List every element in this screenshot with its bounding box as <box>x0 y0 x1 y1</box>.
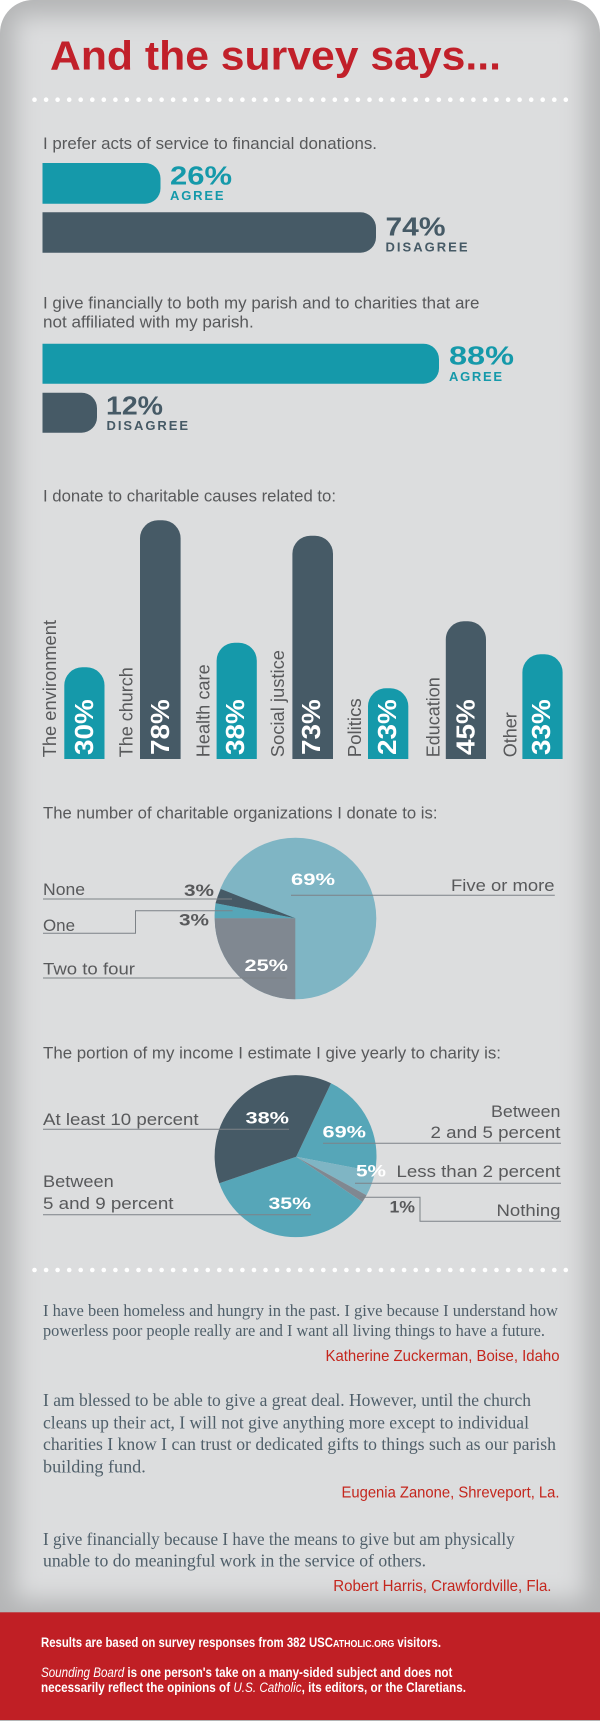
value: 26% agree: 26% <box>170 160 232 190</box>
value: 74% disagree <box>386 212 468 255</box>
column: health care 38%: Health care <box>194 664 214 757</box>
question 2: not affiliated with my parish. <box>43 313 254 331</box>
label: none: 3% <box>184 881 214 900</box>
label: none <box>43 880 232 900</box>
quote: Katherine Zuckerman: I have been homeless and hungry in the past. I give because I understand how <box>43 1301 558 1320</box>
question 2 <box>43 294 480 331</box>
panel: charitable causes bar chart <box>40 488 563 759</box>
footer: disclaimer: necessarily reflect the opinions of U.S. Catholic, its editors, or the Claretians. <box>41 1680 466 1695</box>
label: one: 3% <box>179 910 209 929</box>
label: between 2 and 5 percent: 2 and 5 percent <box>430 1123 561 1142</box>
footer: disclaimer: Sounding Board is one person's take on a many-sided subject and does not <box>41 1665 453 1680</box>
column: health care 38%: 38% <box>220 699 250 755</box>
column: the environment 30%: The environment <box>40 620 60 757</box>
column: other 33%: Other <box>501 712 521 757</box>
quote: Katherine Zuckerman: powerless poor people really are and I want all living things to have a future. <box>43 1321 545 1340</box>
column: the environment 30%: 30% <box>69 699 99 755</box>
value: 88% agree: 88% <box>449 340 514 370</box>
column: other 33%: 33% <box>526 699 556 755</box>
column: other 33% <box>501 654 563 759</box>
quote: Eugenia Zanone: charities I know I can trust or dedicated gifts to things such as our parish <box>43 1434 556 1454</box>
label: less than 2 percent: Less than 2 percent <box>396 1162 561 1181</box>
value: 12% disagree: 12% <box>106 390 163 420</box>
dotted divider top <box>32 97 568 102</box>
label: five or more: 69% <box>291 870 335 889</box>
label: between 2 and 5 percent <box>322 1102 561 1143</box>
label: between 5 and 9 percent <box>43 1172 311 1215</box>
pie chart 2 <box>215 1075 377 1237</box>
label: less than 2 percent: 5% <box>356 1162 386 1181</box>
column: the church 78% <box>116 520 181 759</box>
column: health care 38% <box>194 643 257 759</box>
quote: Eugenia Zanone: building fund. <box>43 1456 146 1476</box>
quote: Robert Harris: Robert Harris, Crawfordville, Fla. <box>333 1578 552 1595</box>
label: between 5 and 9 percent: Between <box>43 1172 114 1191</box>
column: education 45% <box>423 621 486 759</box>
column: education 45%: Education <box>423 677 443 757</box>
value: 88% agree <box>449 340 514 384</box>
column: politics 23% <box>345 688 408 759</box>
label: between 5 and 9 percent: 5 and 9 percent <box>43 1194 174 1213</box>
footer: survey note: Results are based on survey responses from 382 USCATHOLIC.ORG visitors. <box>41 1635 441 1650</box>
quote: Eugenia Zanone: I am blessed to be able to give a great deal. However, until the church <box>43 1390 531 1410</box>
value: 12% disagree <box>106 390 188 433</box>
question 3: I donate to charitable causes related to: <box>43 488 336 506</box>
column: social justice 73%: Social justice <box>268 650 288 757</box>
value: 26% agree: AGREE <box>170 188 224 203</box>
panel: acts of service <box>42 135 468 255</box>
quote: Eugenia Zanone <box>43 1390 560 1501</box>
title: And the survey says... <box>50 32 501 78</box>
value: 74% disagree: DISAGREE <box>386 240 468 255</box>
column: education 45%: 45% <box>450 699 480 755</box>
panel: portion of income pie chart <box>43 1044 561 1237</box>
panel: number of organizations pie chart <box>43 804 555 999</box>
label: one: One <box>43 916 75 935</box>
label: less than 2 percent <box>355 1162 561 1183</box>
label: nothing: Nothing <box>496 1201 560 1220</box>
value: 26% agree <box>170 160 232 203</box>
value: 74% disagree: 74% <box>386 212 446 242</box>
dotted divider bottom <box>32 1268 568 1272</box>
value: 12% disagree: DISAGREE <box>106 418 188 433</box>
question 2: I give financially to both my parish and to charities that are <box>43 294 480 312</box>
label: two to four: 25% <box>244 956 288 975</box>
bar: disagree 12% <box>42 393 97 433</box>
label: none: None <box>43 880 85 899</box>
quote: Katherine Zuckerman <box>43 1301 560 1365</box>
question 4: The number of charitable organizations I donate to is: <box>43 804 438 822</box>
quote: Eugenia Zanone: Eugenia Zanone, Shreveport, La. <box>342 1484 560 1501</box>
quote: Robert Harris <box>43 1529 552 1595</box>
bar: disagree 74% <box>42 212 376 253</box>
label: between 2 and 5 percent: 69% <box>322 1123 366 1142</box>
column: social justice 73%: 73% <box>296 699 326 755</box>
label: two to four: Two to four <box>43 959 135 978</box>
panel: parish and charities <box>42 294 514 433</box>
value: 88% agree: AGREE <box>449 369 502 384</box>
column: the environment 30% <box>40 620 104 759</box>
footer: disclaimer <box>41 1665 466 1695</box>
quote: Robert Harris: I give financially because I have the means to give but am physically <box>43 1529 515 1549</box>
footer band <box>0 1612 600 1720</box>
label: at least 10 percent <box>43 1109 289 1129</box>
quote: Eugenia Zanone: cleans up their act, I will not give anything more except to individual <box>43 1412 529 1432</box>
column: politics 23%: 23% <box>372 699 402 755</box>
question 5: The portion of my income I estimate I give yearly to charity is: <box>43 1044 501 1062</box>
label: nothing <box>360 1197 561 1221</box>
label: one <box>43 910 233 935</box>
bar: agree 26% <box>42 163 160 204</box>
quote: Robert Harris: unable to do meaningful work in the service of others. <box>43 1551 426 1571</box>
pie chart 1 <box>215 838 376 999</box>
column: social justice 73% <box>268 536 333 759</box>
label: at least 10 percent: 38% <box>246 1109 289 1128</box>
label: between 5 and 9 percent: 35% <box>268 1194 311 1213</box>
bar: agree 88% <box>42 344 439 384</box>
column: the church 78%: The church <box>116 667 136 757</box>
column: politics 23%: Politics <box>345 698 365 757</box>
question 1: I prefer acts of service to financial donations. <box>43 135 377 153</box>
quote: Katherine Zuckerman: Katherine Zuckerman, Boise, Idaho <box>326 1348 560 1365</box>
label: nothing: 1% <box>390 1198 415 1217</box>
label: five or more <box>291 870 555 895</box>
label: two to four <box>43 956 288 978</box>
label: between 2 and 5 percent: Between <box>491 1102 560 1121</box>
label: five or more: Five or more <box>451 876 554 895</box>
label: at least 10 percent: At least 10 percent <box>43 1110 199 1129</box>
column: the church 78%: 78% <box>145 699 175 755</box>
